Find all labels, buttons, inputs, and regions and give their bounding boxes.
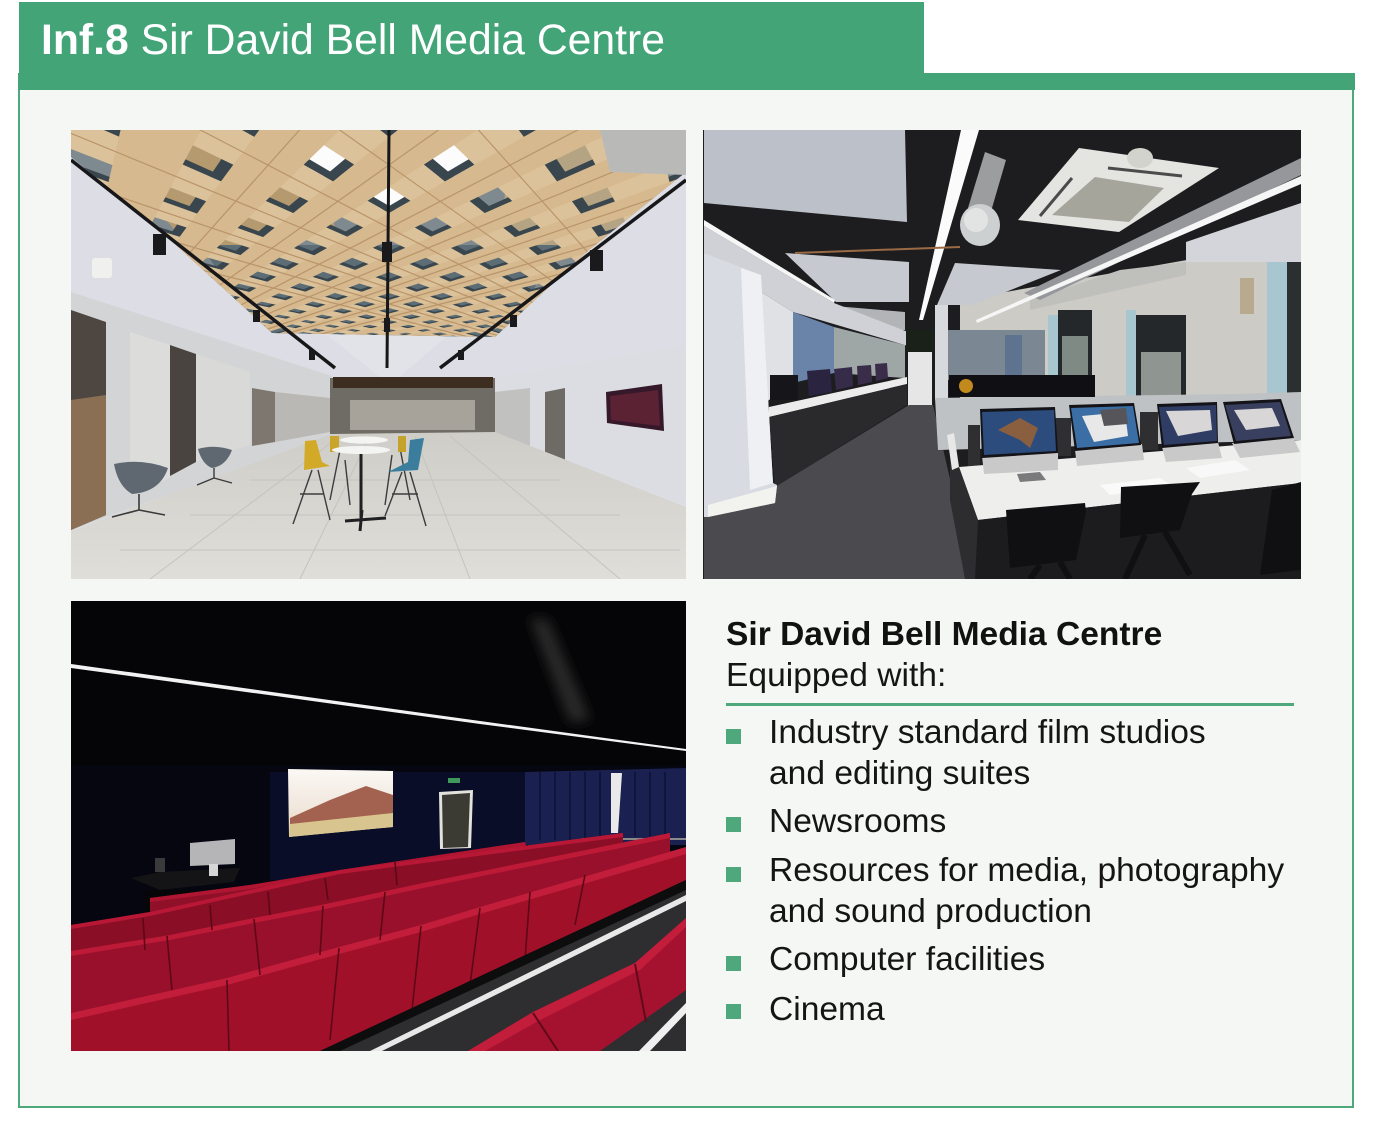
front desk <box>959 440 1301 520</box>
floor <box>71 432 686 579</box>
lighting rails <box>71 130 686 368</box>
bullet: resources <box>726 852 1284 930</box>
far wall <box>935 330 1045 380</box>
timber lattice <box>71 130 683 337</box>
hanging sphere <box>960 204 1000 246</box>
title <box>19 2 924 75</box>
photo: atrium with timber lattice skylight <box>71 130 686 579</box>
heading: Sir David Bell Media Centre <box>726 616 1162 653</box>
wall sensor <box>92 258 112 278</box>
seat dividers <box>143 862 585 1051</box>
column and centre wall <box>935 305 948 400</box>
right wall and windows <box>960 240 1300 440</box>
tv <box>606 384 664 431</box>
lounge chairs <box>112 447 232 517</box>
aisle <box>322 882 686 1051</box>
photo: computer suite with iMacs <box>703 130 1301 579</box>
air conditioning unit <box>1018 148 1219 232</box>
exit door <box>439 778 473 849</box>
imac 1 <box>980 407 1058 482</box>
soffit beneath left light <box>704 226 908 346</box>
bullet: resources: and sound production <box>769 892 1092 930</box>
keyboards <box>1100 478 1172 495</box>
cinema screen <box>288 769 393 837</box>
lectern with computer <box>131 839 240 940</box>
bullet: film studios: Industry standard film studios <box>769 714 1206 751</box>
photo: cinema with red seats <box>71 601 686 1051</box>
bullet: computer facilities: Computer facilities <box>769 941 1045 978</box>
curtains <box>71 765 686 930</box>
front seats <box>468 918 686 1051</box>
column <box>611 773 622 833</box>
bullet: resources: Resources for media, photography <box>769 852 1284 889</box>
carpet <box>704 405 973 579</box>
chairs <box>1006 482 1301 575</box>
imac 2 <box>1069 403 1144 466</box>
back rows <box>935 392 1301 450</box>
pillar <box>704 253 777 517</box>
ceiling sheen <box>530 618 590 722</box>
header bar <box>18 73 1355 90</box>
duct tray <box>968 152 1006 208</box>
light strip <box>71 664 686 751</box>
bullet: film studios: and editing suites <box>769 754 1030 792</box>
left bench <box>769 377 907 417</box>
seat rows <box>71 833 686 1051</box>
bullet: cinema: Cinema <box>769 991 885 1028</box>
imac 4 <box>1223 399 1300 458</box>
title text: Inf.8 Sir David Bell Media Centre <box>41 16 665 64</box>
ceiling panels <box>704 130 907 222</box>
lower walls <box>71 292 332 530</box>
bullet: newsrooms: Newsrooms <box>769 803 946 840</box>
light tubes <box>919 130 979 320</box>
high table and stools <box>293 436 426 531</box>
bullet: film studios <box>726 714 1206 792</box>
imac 3 <box>1157 402 1222 462</box>
back room <box>330 378 495 434</box>
text block: facilities <box>726 616 1294 706</box>
subheading: Equipped with: <box>726 657 946 694</box>
